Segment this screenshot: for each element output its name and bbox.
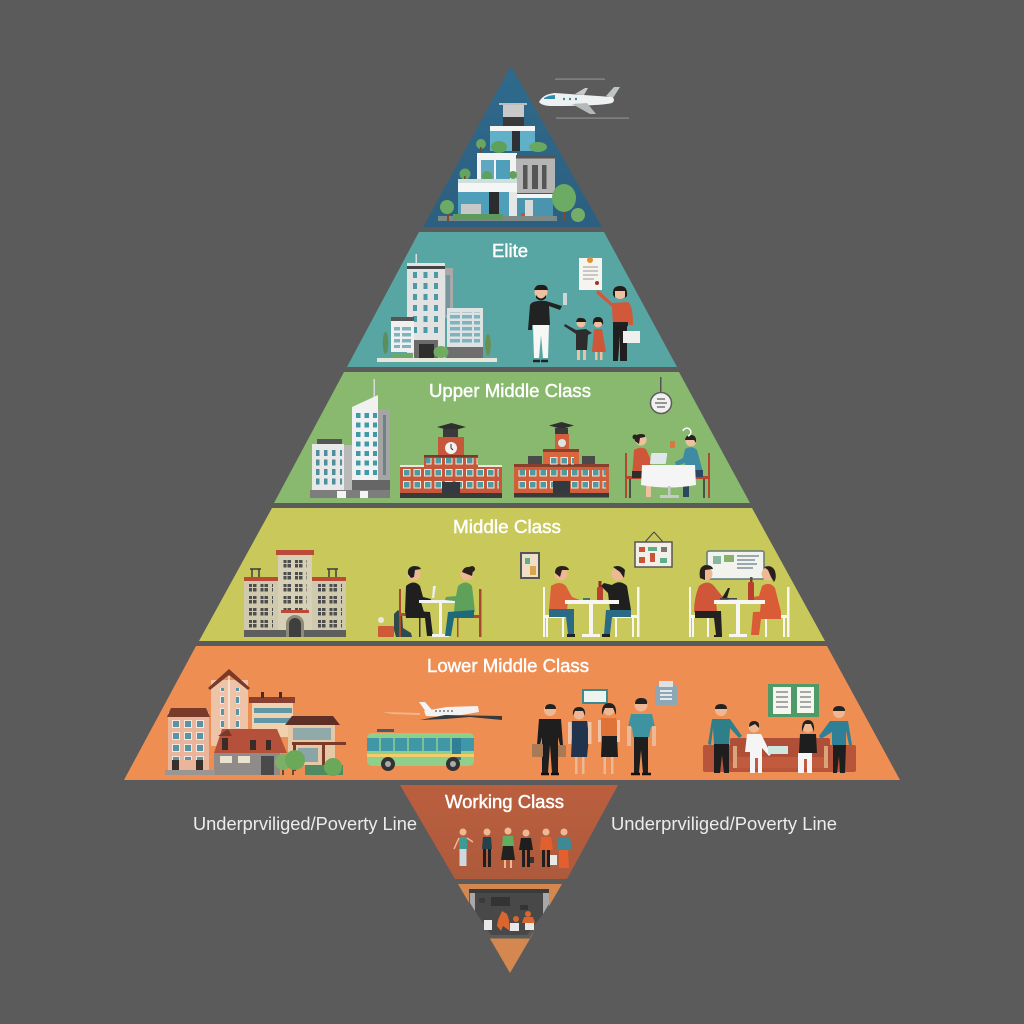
icon: private jet <box>539 78 629 119</box>
icon: office buildings <box>377 254 497 362</box>
icon: apartment block <box>244 550 346 637</box>
panel: Elite <box>347 232 677 367</box>
scene: couple at laptop <box>378 566 482 637</box>
heading: Upper Middle Class <box>429 381 591 401</box>
icon: second school <box>514 422 609 498</box>
scene: two men at table <box>520 532 672 637</box>
icon: towers <box>310 379 390 498</box>
heading: Lower Middle Class <box>427 656 589 676</box>
panel: Upper Middle Class <box>274 372 750 503</box>
heading: Working Class <box>445 792 564 812</box>
panel: Middle Class <box>199 508 825 641</box>
panel: bottom tier with workshop <box>458 884 562 973</box>
icon: family with certificate <box>528 257 640 361</box>
label: poverty line right: Underprviliged/Poverty Line <box>611 814 837 834</box>
scene: four people with documents <box>532 681 677 774</box>
icon: six workers <box>454 828 572 868</box>
scene: two people with whiteboard <box>689 551 790 637</box>
heading: Middle Class <box>453 517 561 537</box>
icon: two people at a table <box>625 428 710 498</box>
icon: town houses <box>165 669 346 776</box>
icon: school with clock tower <box>400 423 502 498</box>
icon: bus <box>367 729 474 771</box>
workshop image <box>469 889 549 938</box>
icon: wall clock <box>650 377 672 414</box>
panel: Lower Middle Class <box>124 646 900 780</box>
panel: Working Class <box>400 785 618 879</box>
icon: mansion <box>438 103 585 222</box>
icon: small plane <box>383 702 502 720</box>
label: poverty line left: Underprviliged/Poverty Line <box>193 814 417 834</box>
scene: family on sofa with notice board <box>703 684 856 773</box>
panel: top tier with mansion and private jet <box>423 66 629 227</box>
heading: Elite <box>492 241 528 261</box>
